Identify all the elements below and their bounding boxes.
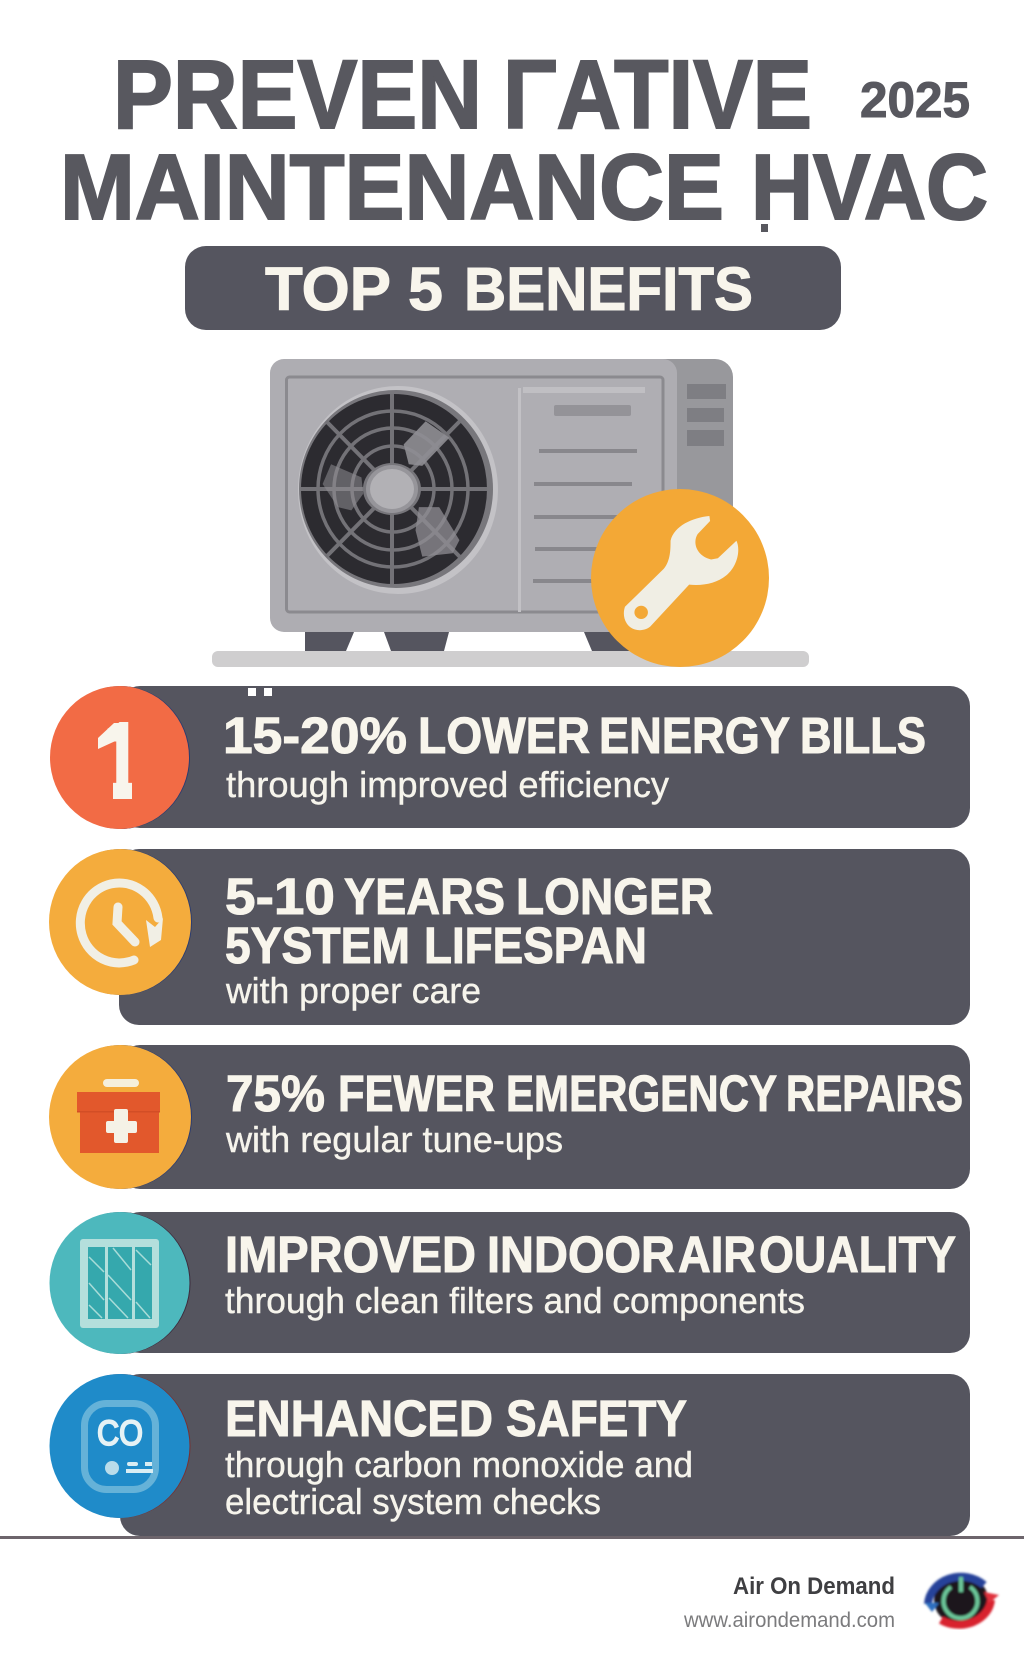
title — [60, 40, 988, 239]
heading: LONGER — [516, 868, 713, 925]
panel 3: emergency repairs — [49, 1045, 970, 1189]
heading: IMPROVED — [225, 1226, 476, 1283]
title: MAINTENANCE — [60, 135, 724, 239]
heading: SAFETY — [506, 1390, 687, 1447]
heading: AIR — [678, 1226, 756, 1283]
service panel — [518, 387, 645, 612]
panel 5: enhanced safety — [50, 1374, 970, 1536]
heading — [225, 1390, 687, 1447]
ground slab — [212, 651, 809, 667]
subtext: with proper care — [225, 970, 481, 1011]
year label: 2025 — [860, 72, 970, 128]
wrench badge — [591, 489, 769, 667]
icon: number 1: 1 — [102, 681, 140, 827]
heading: OUALITY — [759, 1226, 956, 1283]
heading: BILLS — [800, 707, 926, 764]
side vents — [687, 384, 726, 446]
heading: LIFESPAN — [424, 917, 647, 974]
icon: clock — [80, 883, 163, 963]
panel 4: indoor air quality — [50, 1212, 970, 1354]
fan — [298, 386, 498, 594]
heading: INDOOR — [487, 1226, 675, 1283]
footer: brand name: Air On Demand — [733, 1573, 895, 1600]
unit feet — [305, 632, 640, 651]
heading — [225, 1226, 956, 1283]
illustration: outdoor AC unit with wrench badge — [212, 359, 809, 667]
title: PREVEN — [113, 40, 482, 149]
heading: 15-20% — [223, 707, 407, 764]
title: ΓATIVE — [503, 40, 812, 149]
icon: CO detector — [84, 1404, 156, 1490]
panel 5: enhanced safety: electrical system checks — [225, 1481, 601, 1522]
heading: EMERGENCY — [506, 1065, 777, 1122]
subtext: through carbon monoxide and — [225, 1444, 693, 1485]
heading: ENHANCED — [225, 1390, 493, 1447]
heading: REPAIRS — [786, 1065, 963, 1122]
heading: YEARS — [344, 868, 505, 925]
heading — [226, 1065, 963, 1122]
heading — [225, 868, 713, 974]
panel 1: energy bills — [50, 681, 970, 829]
heading: FEWER — [338, 1065, 495, 1122]
panel 2: system lifespan — [49, 849, 970, 1025]
banner: top 5 benefits: TOP — [265, 255, 391, 323]
icon: toolbox — [77, 1079, 160, 1153]
heading: ENERGY — [599, 707, 790, 764]
banner: top 5 benefits — [185, 246, 841, 330]
icon: number 1 — [98, 722, 132, 799]
heading: 5YSTEM — [225, 917, 410, 974]
icon: air filter — [80, 1239, 159, 1328]
icon: brand logo — [925, 1575, 999, 1625]
subtext: through clean filters and components — [225, 1280, 805, 1321]
unit side — [660, 359, 733, 632]
heading: 5-10 — [225, 868, 335, 925]
banner: top 5 benefits: BENEFITS — [464, 255, 753, 323]
heading — [223, 707, 926, 764]
subtext: with regular tune-ups — [225, 1119, 563, 1160]
footer: website: www.airondemand.com — [683, 1609, 895, 1632]
title: HVAC — [751, 135, 988, 239]
icon: CO detector: CO — [97, 1414, 143, 1453]
subtext: through improved efficiency — [226, 764, 669, 805]
unit front — [270, 359, 677, 632]
banner: top 5 benefits: 5 — [408, 255, 443, 323]
heading: 75% — [226, 1065, 325, 1122]
heading: LOWER — [418, 707, 590, 764]
